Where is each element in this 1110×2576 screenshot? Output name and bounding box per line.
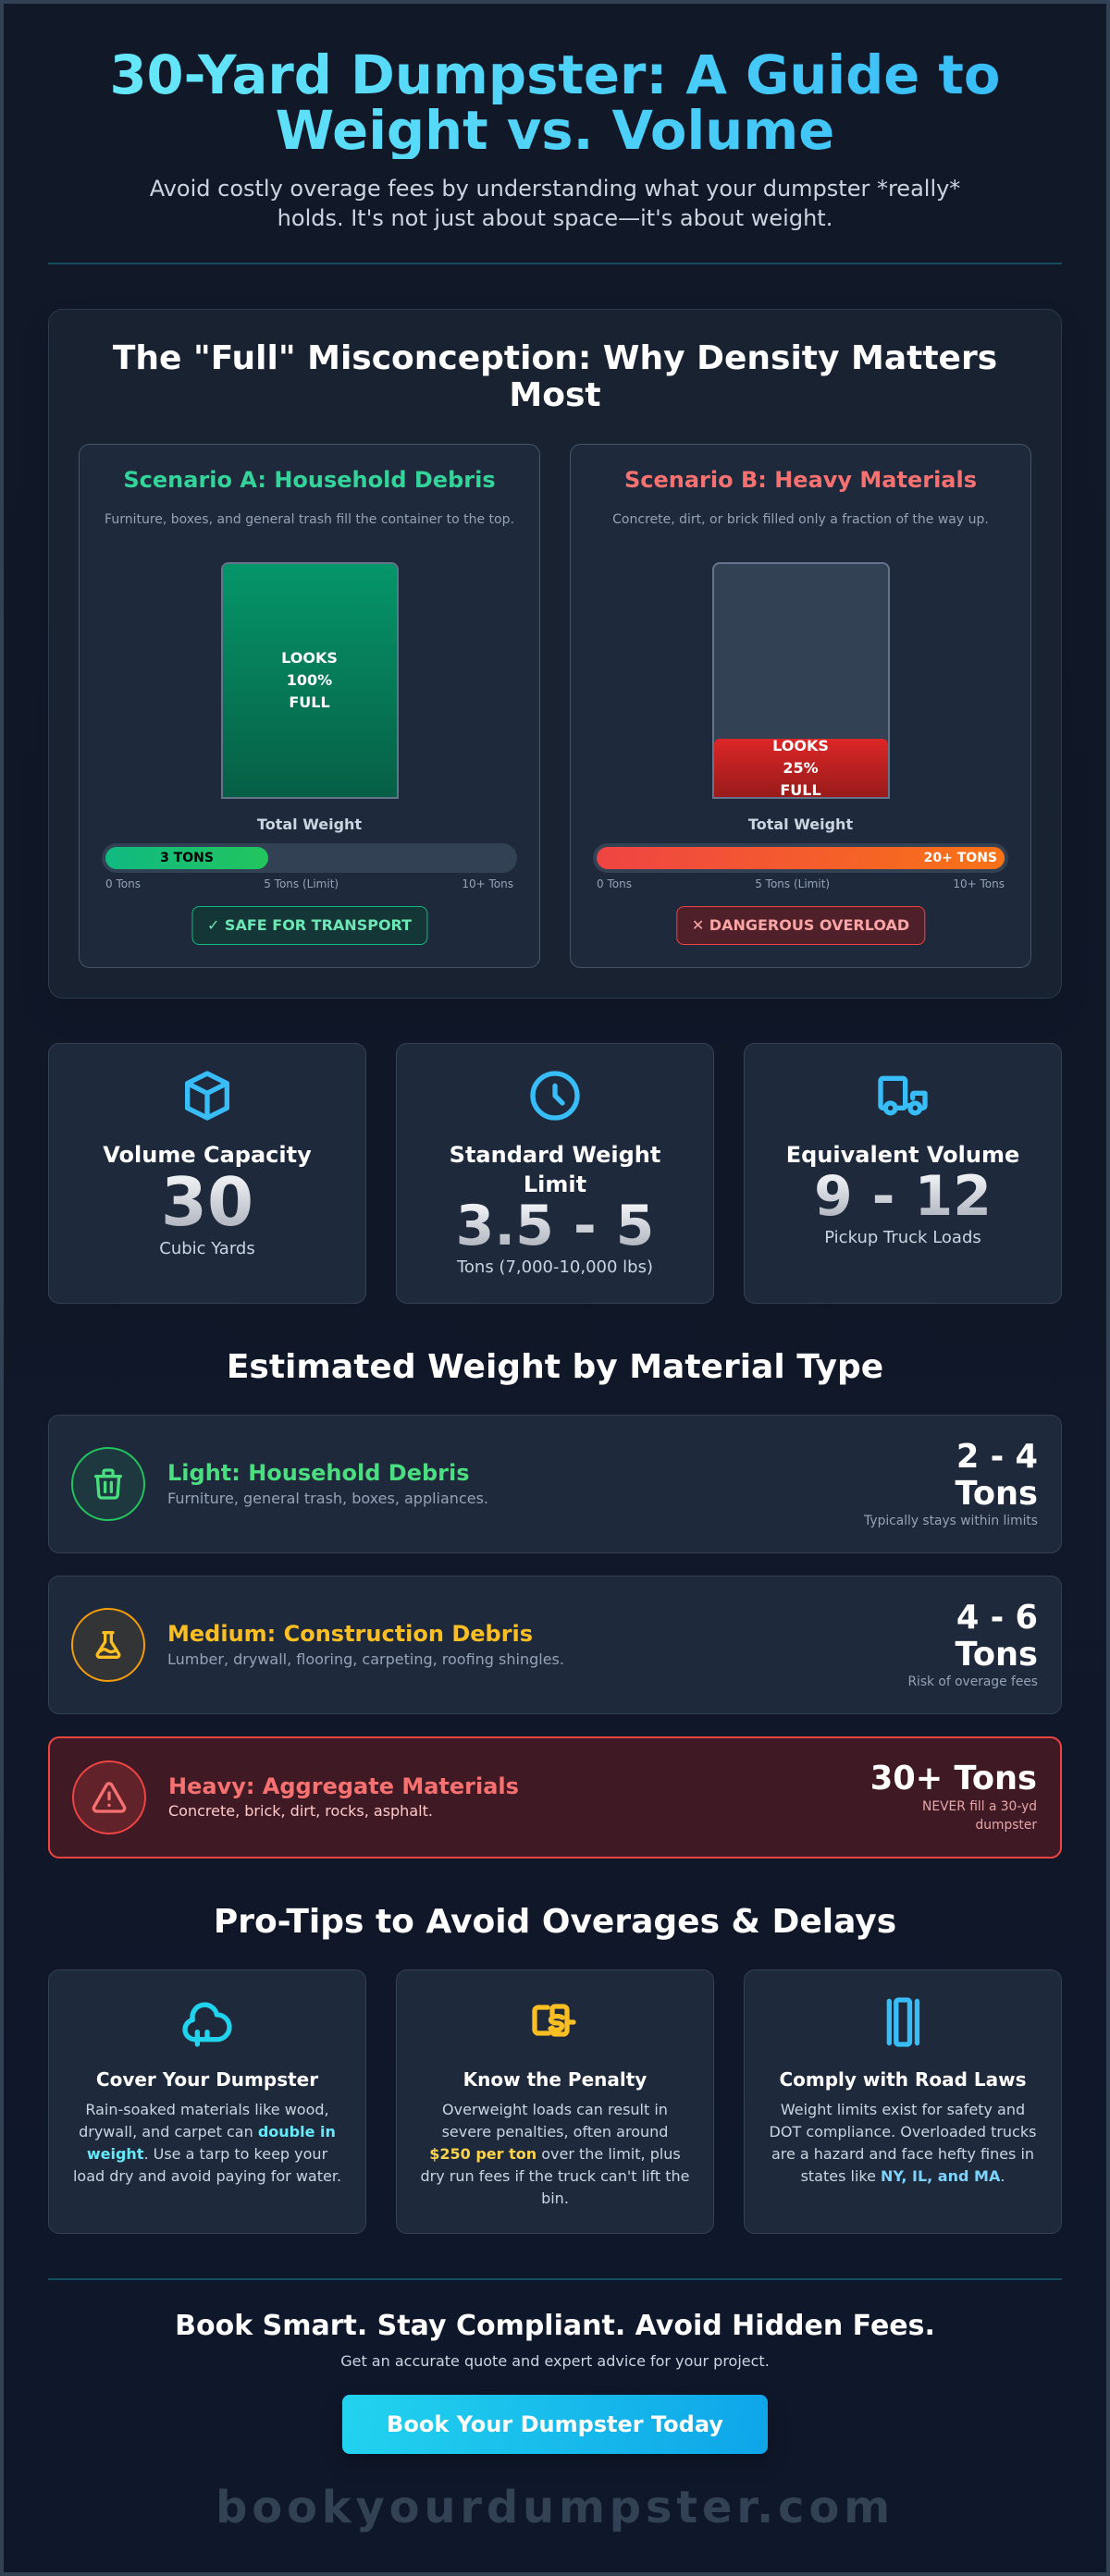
material examples: Furniture, general trash, boxes, appliances. xyxy=(167,1490,488,1507)
panel heading: The "Full" Misconception: Why Density Matters xyxy=(113,339,997,377)
stat title: Volume Capacity xyxy=(103,1142,312,1168)
panel: scenario B xyxy=(570,444,1031,968)
stat card: volume capacity xyxy=(48,1043,366,1304)
tip card: know the penalty xyxy=(396,1969,714,2234)
subtitle: Avoid costly overage fees by understanding what your dumpster *really* xyxy=(150,176,960,202)
tip title: Know the Penalty xyxy=(463,2068,647,2091)
row: medium construction debris xyxy=(48,1576,1062,1714)
tip text: load dry and avoid paying for water. xyxy=(73,2167,341,2185)
total weight label: Total Weight xyxy=(748,816,853,833)
status badge: overload: ✕ DANGEROUS OVERLOAD xyxy=(692,916,909,934)
weight note: NEVER fill a 30-yd xyxy=(922,1799,1037,1814)
button: book your dumpster xyxy=(342,2395,768,2454)
green fill level: 100% xyxy=(287,671,332,689)
material name: Heavy: Aggregate Materials xyxy=(168,1773,519,1799)
status badge: safe: ✓ SAFE FOR TRANSPORT xyxy=(207,916,412,934)
panel: the full misconception xyxy=(48,309,1062,999)
weight note xyxy=(922,1799,1038,1833)
footer subline: Get an accurate quote and expert advice for your project. xyxy=(340,2352,770,2370)
green fill level xyxy=(222,564,396,797)
heading: material weights: Estimated Weight by Material Type xyxy=(227,1348,883,1386)
weight range: Tons xyxy=(955,1636,1038,1674)
weight bar fill: 3 TONS xyxy=(160,851,214,865)
footer call to action xyxy=(175,2310,935,2533)
red fill level: 25% xyxy=(783,758,819,777)
weight bar: 20+ tons xyxy=(593,843,1008,873)
tip text: dry run fees if the truck can't lift the xyxy=(420,2167,689,2185)
green fill level: FULL xyxy=(289,693,330,711)
subtitle: holds. It's not just about space—it's about weight. xyxy=(278,205,832,231)
tip text: states like NY, IL, and MA. xyxy=(801,2167,1005,2185)
scenario B title: Scenario B: Heavy Materials xyxy=(624,467,977,493)
weight scale labels: 0 Tons xyxy=(597,877,632,890)
total weight label: Total Weight xyxy=(257,816,362,833)
stat title xyxy=(450,1142,660,1197)
red fill level: FULL xyxy=(780,780,821,799)
dumpster graphic: 100% full xyxy=(220,562,398,799)
stat value: 3.5 - 5 xyxy=(456,1194,654,1258)
icon: money penalty xyxy=(532,2004,576,2037)
tip text: DOT compliance. Overloaded trucks xyxy=(770,2123,1036,2141)
material name: Medium: Construction Debris xyxy=(167,1621,533,1647)
stat value: 9 - 12 xyxy=(814,1164,992,1229)
weight bar: 3 tons xyxy=(102,843,517,873)
title: Weight vs. Volume xyxy=(276,100,834,162)
tip text: $250 per ton over the limit, plus xyxy=(429,2145,681,2163)
green fill level: LOOKS xyxy=(281,649,338,667)
stat unit: Cubic Yards xyxy=(159,1239,255,1258)
weight scale labels: 10+ Tons xyxy=(462,877,513,890)
status badge: safe xyxy=(191,906,427,945)
header xyxy=(109,44,1001,231)
tip text xyxy=(73,2101,341,2185)
weight range: Tons xyxy=(955,1475,1038,1513)
tip title: Comply with Road Laws xyxy=(779,2068,1027,2091)
weight range xyxy=(955,1438,1038,1513)
icon: trash xyxy=(71,1447,145,1521)
panel heading xyxy=(113,339,997,414)
title: 30-Yard Dumpster: A Guide to xyxy=(109,44,1001,106)
stat title: Limit xyxy=(524,1171,586,1197)
stat unit: Pickup Truck Loads xyxy=(824,1228,981,1247)
tip title: Cover Your Dumpster xyxy=(96,2068,318,2091)
weight scale labels xyxy=(597,877,1005,890)
tip text: are a hazard and face hefty fines in xyxy=(771,2145,1034,2163)
tip text: severe penalties, often around xyxy=(442,2123,668,2141)
tip text: weight. Use a tarp to keep your xyxy=(87,2145,327,2163)
weight scale labels: 5 Tons (Limit) xyxy=(264,877,339,890)
weight scale labels xyxy=(105,877,513,890)
tip card: cover your dumpster xyxy=(48,1969,366,2234)
stat unit: Tons (7,000-10,000 lbs) xyxy=(457,1257,653,1277)
dumpster graphic: 25% full xyxy=(712,562,890,799)
status badge: overload xyxy=(676,906,925,945)
tip text xyxy=(770,2101,1036,2185)
tip text: Rain-soaked materials like wood, xyxy=(85,2101,329,2118)
icon: clock xyxy=(530,1071,580,1121)
tip card: comply with road laws xyxy=(744,1969,1062,2234)
stat card: standard weight limit xyxy=(396,1043,714,1304)
weight range: 30+ Tons xyxy=(870,1760,1037,1797)
tip text: Weight limits exist for safety and xyxy=(781,2101,1025,2118)
red fill level: LOOKS xyxy=(772,736,829,754)
weight scale labels: 0 Tons xyxy=(105,877,141,890)
icon: truck xyxy=(878,1076,928,1115)
stat value xyxy=(419,1198,691,1254)
tip text: Overweight loads can result in xyxy=(442,2101,668,2118)
icon: road lanes xyxy=(886,1997,919,2047)
tip text: bin. xyxy=(541,2190,569,2207)
stat title: Equivalent Volume xyxy=(786,1142,1019,1168)
panel heading: Most xyxy=(509,376,601,414)
weight scale labels: 10+ Tons xyxy=(953,877,1005,890)
button: book your dumpster: Book Your Dumpster Today xyxy=(387,2411,723,2437)
stat card: equivalent volume xyxy=(744,1043,1062,1304)
footer headline: Book Smart. Stay Compliant. Avoid Hidden Fees. xyxy=(175,2310,935,2342)
scenario B description: Concrete, dirt, or brick filled only a fraction of the way up. xyxy=(612,512,989,527)
material examples: Lumber, drywall, flooring, carpeting, roofing shingles. xyxy=(167,1650,564,1668)
icon: cube xyxy=(185,1071,229,1121)
subtitle xyxy=(150,176,960,231)
watermark: website: bookyourdumpster.com xyxy=(216,2482,894,2533)
tip text: drywall, and carpet can double in xyxy=(79,2123,336,2141)
icon: rain cloud xyxy=(182,2003,232,2047)
stat value xyxy=(71,1169,343,1235)
stat value: 30 xyxy=(161,1163,253,1241)
weight bar fill xyxy=(105,847,268,869)
weight bar fill: 20+ TONS xyxy=(924,851,997,865)
weight range xyxy=(955,1599,1038,1674)
tip text xyxy=(420,2101,689,2207)
weight note: Risk of overage fees xyxy=(907,1674,1038,1689)
stat title: Standard Weight xyxy=(450,1142,660,1168)
weight range: 4 - 6 xyxy=(956,1599,1038,1637)
weight range: 2 - 4 xyxy=(956,1438,1038,1476)
red fill level xyxy=(714,739,888,797)
weight bar fill xyxy=(597,847,1005,869)
weight note: dumpster xyxy=(976,1818,1037,1833)
icon: warning triangle xyxy=(72,1760,146,1834)
weight note: Typically stays within limits xyxy=(864,1514,1038,1528)
scenario A title: Scenario A: Household Debris xyxy=(123,467,496,493)
row: light household debris xyxy=(48,1415,1062,1553)
icon: flask xyxy=(71,1608,145,1682)
title xyxy=(109,44,1001,162)
material examples: Concrete, brick, dirt, rocks, asphalt. xyxy=(168,1802,433,1820)
weight scale labels: 5 Tons (Limit) xyxy=(755,877,830,890)
material name: Light: Household Debris xyxy=(167,1460,470,1486)
row: heavy aggregate materials xyxy=(48,1736,1062,1858)
panel: scenario A xyxy=(79,444,540,968)
heading: pro tips: Pro-Tips to Avoid Overages & Delays xyxy=(214,1903,896,1941)
scenario A description: Furniture, boxes, and general trash fill the container to the top. xyxy=(105,512,514,527)
stat value xyxy=(767,1169,1039,1224)
